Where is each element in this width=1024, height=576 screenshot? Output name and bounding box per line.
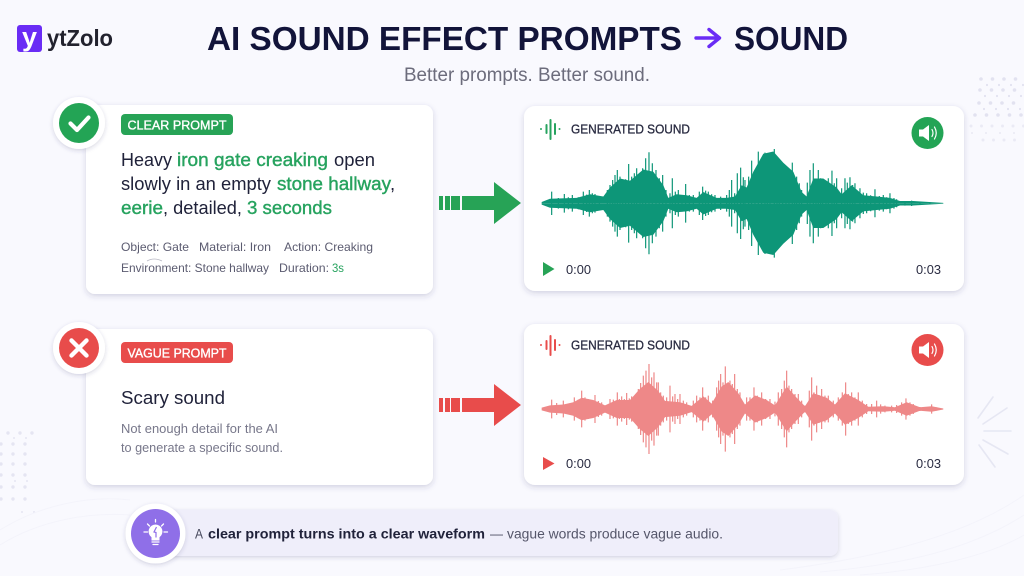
subtitle: Better prompts. Better sound. [404,65,650,86]
prompt text: 3 seconds [247,197,332,218]
prompt text: stone hallway [277,173,392,194]
prompt attributes: Action: Creaking [284,240,373,254]
prompt text: , [390,173,395,194]
callout text [195,526,723,542]
panel: clear prompt [53,97,433,294]
prompt attributes: 3s [332,261,344,275]
time end: 0:03 [916,456,941,471]
callout text: A [195,526,204,542]
icon: cross badge [53,322,105,374]
callout text: — [490,526,503,542]
callout text: vague words produce vague audio. [507,526,723,542]
prompt attributes [121,240,373,275]
decorative rays: lower right [978,397,1011,467]
logo mark: y [22,22,37,52]
chart: clear waveform [542,149,943,258]
heading: generated sound: GENERATED SOUND [571,338,690,352]
panel: vague generated sound [524,324,964,485]
prompt text: open [334,149,375,170]
logo [17,22,113,52]
title: SOUND [734,21,848,58]
icon: sound bars [541,120,560,139]
label: vague prompt [121,342,233,363]
chart: vague waveform [542,364,943,454]
decorative dots: bottom left [1,433,37,512]
prompt text [121,149,395,218]
callout text: clear prompt turns into a clear waveform [208,526,485,542]
explanation: Not enough detail for the AI [121,422,278,436]
prompt attributes: Duration: [279,261,329,275]
logo wordmark: ytZolo [47,25,113,51]
prompt attributes: Object: Gate [121,240,189,254]
callout: takeaway [126,504,838,564]
prompt attributes: Material: Iron [199,240,271,254]
icon: speaker [912,334,944,366]
decorative faint contour lines [0,495,1024,575]
explanation [121,422,283,455]
panel: vague prompt [53,322,433,485]
prompt text: iron gate creaking [177,149,328,170]
icon: play [543,457,554,470]
icon: check badge [53,97,105,149]
prompt text: Heavy [121,149,173,170]
prompt text: slowly in an empty [121,173,272,194]
icon: play [543,262,554,276]
label: clear prompt [121,114,233,135]
decorative dots: top right [971,79,1024,140]
panel: clear generated sound [524,106,964,291]
heading: generated sound: GENERATED SOUND [571,122,690,136]
time start: 0:00 [566,262,591,277]
title: AI SOUND EFFECT PROMPTS [207,21,682,58]
icon: sound bars [541,336,560,355]
label: clear prompt: CLEAR PROMPT [128,118,227,132]
icon: light bulb [126,504,186,564]
prompt text: eerie [121,197,163,218]
prompt text: , detailed, [163,197,242,218]
prompt attributes: Environment: Stone hallway [121,261,269,275]
time end: 0:03 [916,262,941,277]
title arrow [696,30,720,46]
explanation: to generate a specific sound. [121,441,283,455]
label: vague prompt: VAGUE PROMPT [128,346,227,360]
arrow: vague prompt to sound [439,384,521,426]
arrow: clear prompt to sound [439,182,521,224]
icon: speaker [912,117,944,149]
time start: 0:00 [566,456,591,471]
prompt text: Scary sound [121,387,225,408]
